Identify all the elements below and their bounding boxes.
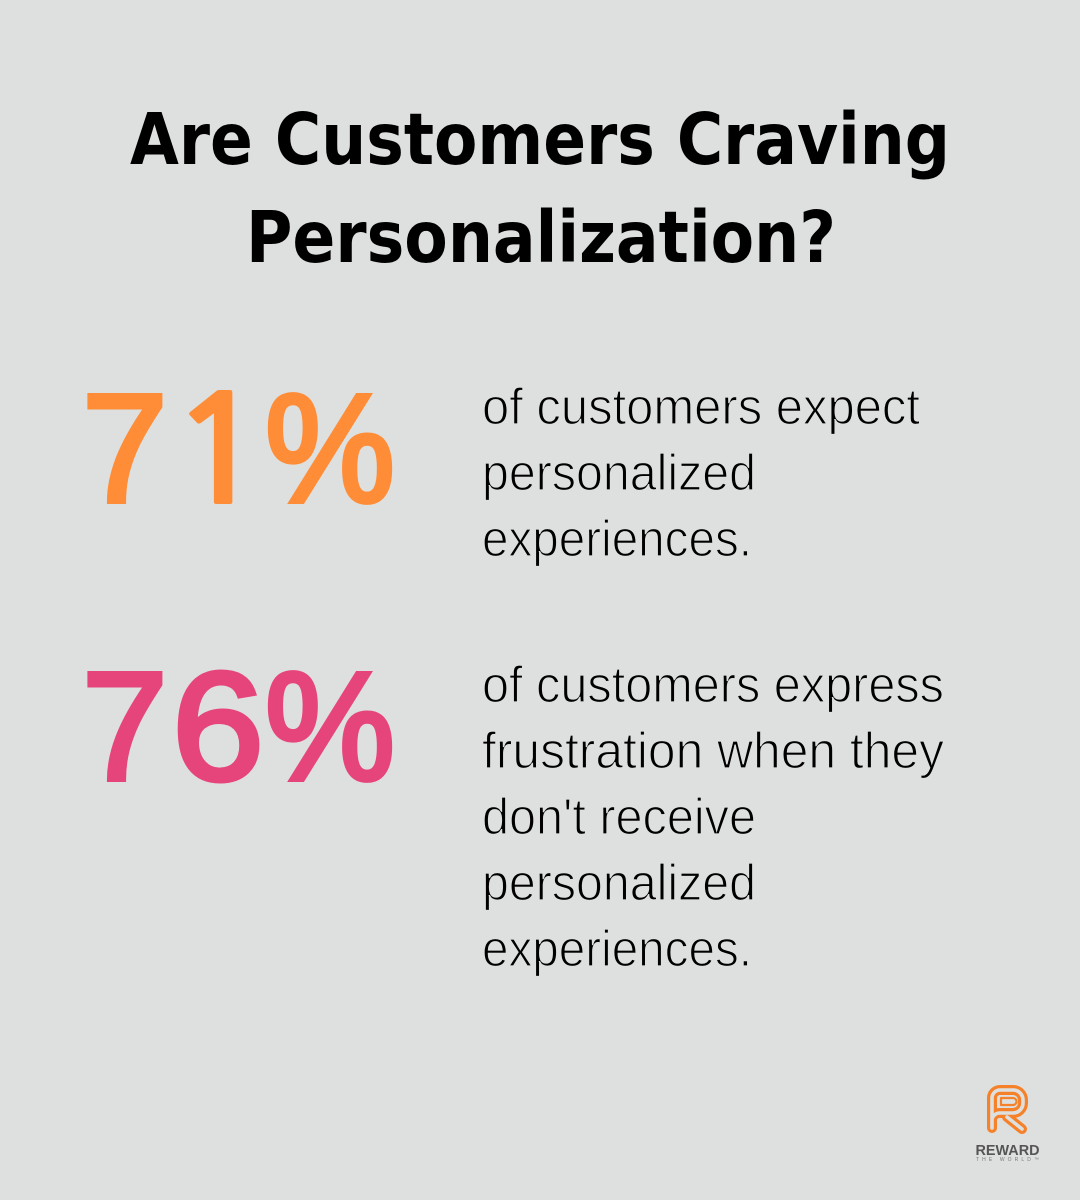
text block: 71% description — [482, 378, 920, 567]
text block: 76% description — [482, 656, 944, 977]
icon: orange R mark — [992, 1090, 1023, 1129]
title: Are Customers Craving — [130, 98, 950, 181]
stat: 76%: % — [265, 640, 395, 812]
stat: 71% — [82, 362, 395, 534]
stat: 71%: 1 — [167, 378, 272, 527]
logo tagline: THE WORLD™ — [976, 1157, 1039, 1163]
stat: 71%: % — [265, 362, 395, 534]
logo: Reward the World — [976, 1090, 1040, 1163]
text block: 76% description: personalized — [482, 854, 756, 911]
text block: 76% description: frustration when they — [482, 722, 944, 779]
text block: 71% description: personalized — [482, 444, 756, 501]
logo wordmark: REWARD — [976, 1143, 1040, 1159]
stat: 76%: 6 — [172, 640, 264, 812]
text block: 71% description: of customers expect — [482, 378, 920, 435]
stat: 71%: 7 — [82, 362, 168, 534]
text block: 71% description: experiences. — [482, 510, 752, 567]
stat: 76% — [82, 640, 395, 812]
text block: 76% description: of customers express — [482, 656, 944, 713]
text block: 76% description: don't receive — [482, 788, 756, 845]
stat: 76%: 7 — [82, 640, 168, 812]
text block: 76% description: experiences. — [482, 920, 752, 977]
title — [130, 98, 950, 279]
title: Personalization? — [246, 196, 836, 279]
